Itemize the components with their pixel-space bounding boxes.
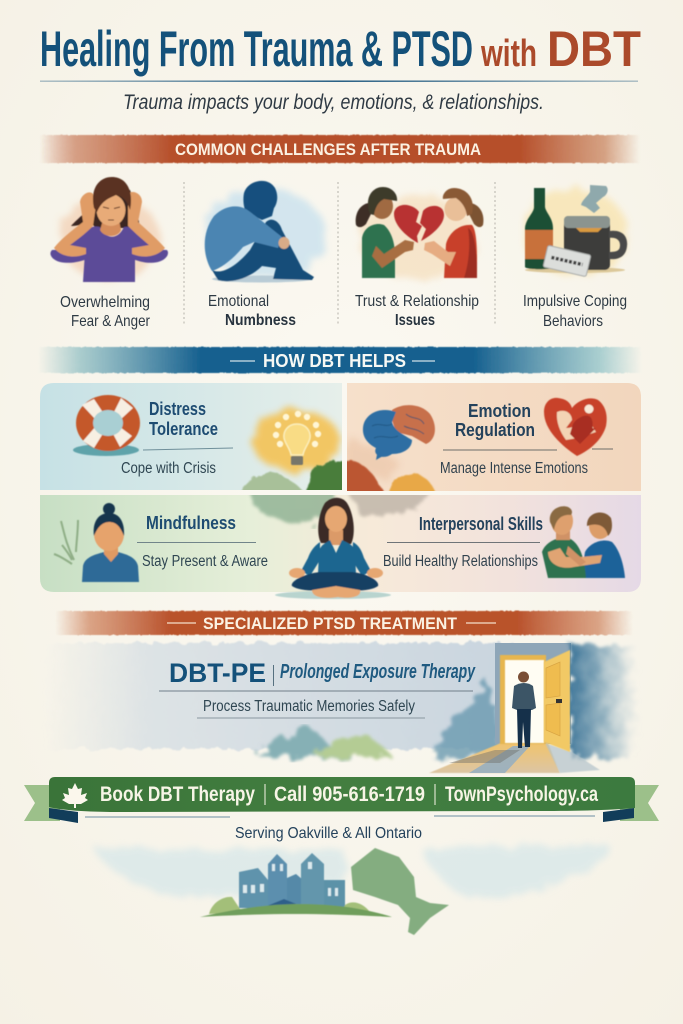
challenge labels: Impulsive Coping (523, 293, 627, 310)
heading: interpersonal skills: Interpersonal Skills (419, 514, 543, 534)
challenge labels: Overwhelming (60, 294, 150, 311)
text: process traumatic memories safely: Process Traumatic Memories Safely (203, 698, 415, 715)
icon: overwhelmed woman (50, 177, 168, 282)
heading: dbt-pe: DBT-PE (169, 658, 266, 688)
icon: life ring (73, 395, 140, 456)
icon: light bulb (273, 411, 321, 465)
cta ribbon (24, 777, 659, 823)
banner: how dbt helps: HOW DBT HELPS (263, 351, 406, 371)
icon: broken relationship (356, 187, 483, 280)
challenge labels: Behaviors (543, 313, 603, 330)
heading: distress tolerance: Distress (149, 399, 206, 419)
challenge labels (60, 293, 627, 330)
panel: dbt-pe (44, 643, 638, 773)
challenge labels: Numbness (225, 312, 296, 329)
challenge labels: Emotional (208, 293, 269, 310)
panel: distress tolerance (40, 383, 350, 496)
heading: prolonged exposure therapy: Prolonged Exposure Therapy (280, 661, 476, 683)
call to action text: Book DBT Therapy (100, 783, 255, 806)
panel: distress tolerance: Tolerance (149, 419, 218, 439)
text: build healthy relationships: Build Healthy Relationships (383, 553, 538, 570)
icon: numb figure (205, 181, 325, 282)
call to action text: TownPsychology.ca (445, 783, 598, 806)
icon: maple leaf (62, 783, 88, 808)
title: DBT (547, 21, 641, 77)
icon: heart (544, 398, 607, 456)
call to action text (100, 783, 598, 806)
text: serving oakville and all ontario: Serving Oakville & All Ontario (235, 825, 422, 842)
icon: meditating woman (275, 498, 391, 599)
location illustration (92, 845, 610, 935)
challenge labels: Trust & Relationship (355, 293, 479, 310)
banner: how dbt helps (38, 347, 642, 373)
bushes (258, 729, 392, 758)
icon: open door with person (429, 650, 600, 773)
heading: mindfulness: Mindfulness (146, 513, 236, 533)
icon: town buildings (200, 853, 392, 917)
challenge labels: Fear & Anger (71, 313, 151, 330)
title: with (480, 33, 537, 75)
panel: emotion regulation (340, 383, 641, 498)
icon: coping items (523, 185, 627, 277)
heading: emotion regulation: Emotion (468, 401, 531, 421)
call to action text: Call 905-616-1719 (274, 783, 425, 806)
banner: common challenges (40, 135, 640, 163)
icon: person with bun (54, 503, 139, 582)
banner: specialized ptsd treatment: SPECIALIZED PTSD TREATMENT (203, 615, 457, 633)
challenge labels: Issues (395, 312, 435, 329)
panel: mindfulness and interpersonal skills (40, 488, 641, 599)
icon: brain (363, 405, 435, 460)
icon: two people embracing (542, 506, 625, 578)
text: cope with crisis: Cope with Crisis (121, 460, 216, 477)
subtitle: Trauma impacts your body, emotions, & relationships. (123, 91, 544, 114)
icon: ontario map (351, 848, 449, 935)
panel: emotion regulation: Regulation (455, 420, 535, 440)
banner: common challenges: COMMON CHALLENGES AFTER TRAUMA (175, 140, 481, 159)
text: stay present and aware: Stay Present & Aware (142, 553, 268, 570)
text: manage intense emotions: Manage Intense Emotions (440, 460, 588, 477)
banner: specialized ptsd treatment (55, 611, 633, 635)
